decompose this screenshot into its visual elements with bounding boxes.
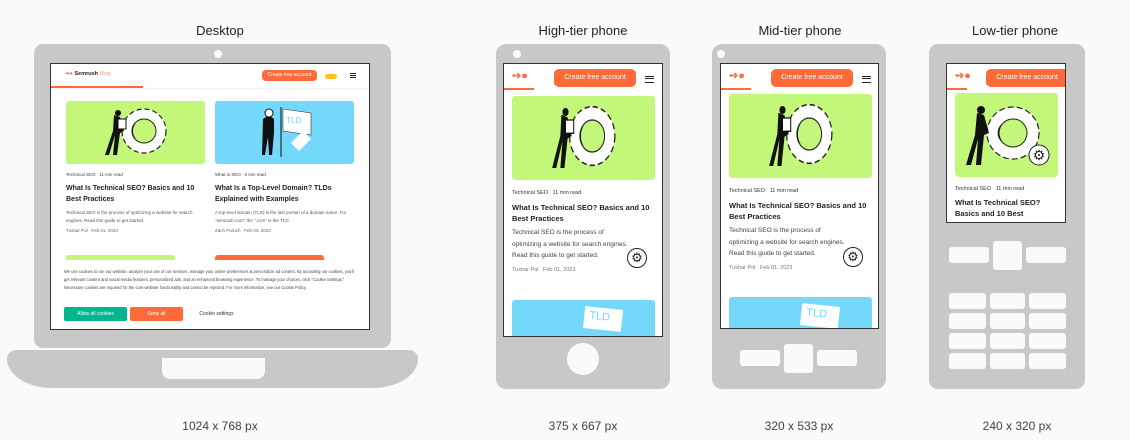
cookie banner [51,260,369,332]
keypad [949,293,1066,369]
illustration [512,96,655,180]
button: allow [64,307,127,321]
title: What Is Technical SEO? Basics and 10 Best [955,198,1040,218]
caption: mid-tier size: 320 x 533 px [765,419,833,433]
laptop lid [34,44,391,348]
illustration: TLD: TLD [286,116,301,125]
illustration [955,93,1058,177]
create account button: Create free account [268,72,311,78]
laptop camera [214,50,222,58]
caption: high-tier size: 375 x 667 px [549,419,617,433]
icon: gear: ⚙ [847,249,859,264]
header [947,69,1065,90]
create account button [771,69,853,87]
laptop notch [162,358,265,379]
icon: gear [627,248,647,268]
menu [645,76,654,83]
laptop base [7,350,418,388]
create account button [554,69,636,87]
home button [567,343,599,375]
description: Technical SEO is the process of optimizing a website for search engines. Read this guide to get started. [66,210,193,223]
title: What Is Technical SEO? Basics and 10 Best Practices [729,201,866,221]
screen [503,63,663,337]
screen [946,63,1066,223]
device: laptop [7,44,418,388]
description [729,227,845,257]
title: What Is a Top-Level Domain? TLDs Explained with Examples [215,185,332,203]
logo icon: ➺● [512,70,528,82]
meta: What is SEO 6 min read [215,172,266,177]
menu [350,73,356,78]
create account button [262,70,317,81]
card [512,96,655,273]
description [512,229,628,259]
logo icon: ➺● [729,70,745,82]
caption: desktop size: 1024 x 768 px [182,419,258,433]
illustration: TLD [215,101,354,164]
header [721,69,871,90]
create account button [986,69,1068,87]
icon: gear [843,247,863,267]
device: high-tier phone [496,44,670,389]
author: Tushar Pol Feb 01, 2023 [729,265,792,271]
author: Tushar Pol Feb 01, 2023 [66,228,118,233]
author: Tushar Pol Feb 01, 2023 [512,267,575,273]
create account button: Create free account [564,74,626,81]
meta: Technical SEO 11 min read [66,172,123,177]
card [955,93,1058,218]
card 2 [215,101,354,233]
description: Read this guide to get started. [729,250,816,257]
camera [513,50,521,58]
cookie text: We use cookies to run our website, analyze your use of our services, manage your online preferences & personalize ad content. By accepting our cookies, you'll get relevant content and social media features, personalized ads, and an enhanced browsing experience. To manage your choices, click "Cookie Settings." Necessary cookies are required for the core website functionality and cannot be rejected. For more information, see our Cookie Policy. [64,269,354,290]
device: mid-tier phone [712,44,886,389]
card [729,94,872,271]
button: deny [130,307,183,321]
meta: Technical SEO 11 min read [955,186,1024,192]
title: What Is Technical SEO? Basics and 10 Best Practices [512,203,649,223]
partial TLD card: TLD [806,307,828,321]
button: deny: Deny all [147,311,166,317]
description: Technical SEO is the process of [729,227,821,234]
card 1 [66,101,205,233]
caption: low-tier size: 240 x 320 px [983,419,1051,433]
logo: ➺● Semrush Blog [65,71,111,77]
button: allow: Allow all cookies [77,311,114,317]
illustration [729,94,872,178]
header [504,69,654,90]
heading: Desktop: Desktop [196,23,244,38]
illustration: gear [66,101,205,164]
partial next cards [66,255,175,261]
logo icon: ➺● [955,70,971,82]
title: What Is Technical SEO? Basics and 10 Best Practices [66,185,194,203]
heading: Mid-tier phone: Mid-tier phone [758,23,842,38]
nav buttons [740,350,780,366]
header bar [51,64,369,88]
screen [720,63,879,329]
partial TLD card [512,300,655,340]
meta: Technical SEO 11 min read [729,188,798,194]
description: optimizing a website for search engines. [729,238,845,246]
illustration: ⚙ [1033,147,1045,163]
create account button: Create free account [996,74,1058,81]
toggle [325,74,337,79]
menu [862,76,871,83]
create account button: Create free account [781,74,843,81]
description: Technical SEO is the process of [512,229,604,236]
heading: Low-tier phone: Low-tier phone [972,23,1058,38]
description: optimizing a website for search engines. [512,240,628,248]
heading: High-tier phone: High-tier phone [539,23,627,38]
description: A top level domain (TLD) is the last portion of a domain name. For "semrush.com" the ".com" is the TLD. [215,210,346,223]
author: Zach Paruch Feb 03, 2023 [215,228,271,233]
navigation keys [949,241,1066,270]
icon: gear: ⚙ [631,250,643,265]
partial TLD card [729,297,872,337]
description: Read this guide to get started. [512,252,599,259]
button: settings: Cookie settings [199,311,234,317]
device: low-tier phone [929,44,1085,389]
laptop screen [50,63,370,330]
camera [717,50,725,58]
meta: Technical SEO 11 min read [512,190,581,196]
partial TLD card: TLD [589,310,611,324]
